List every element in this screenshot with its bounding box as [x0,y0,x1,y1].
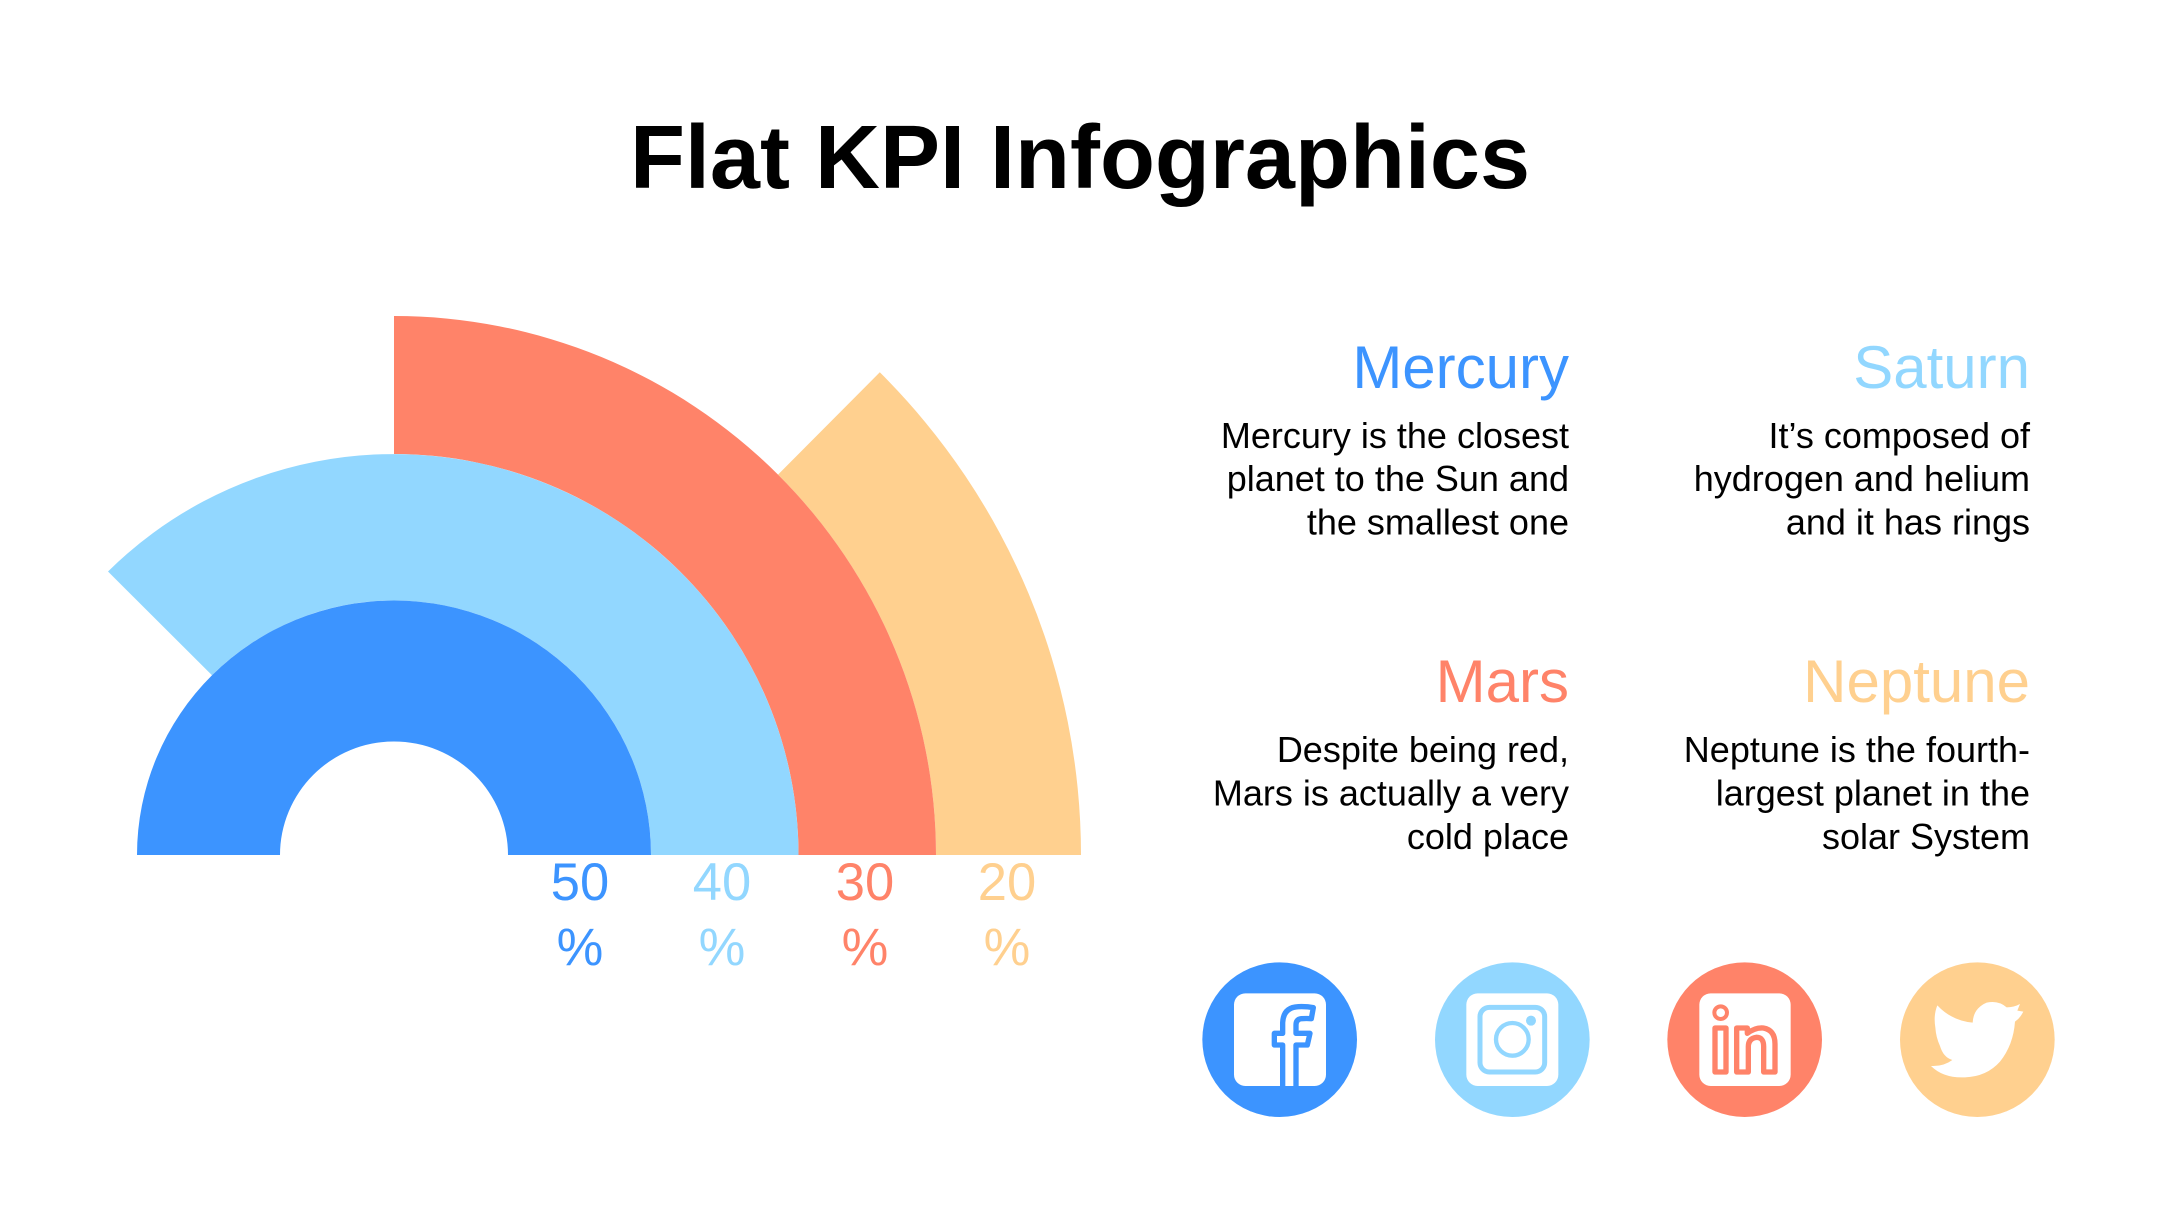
heading: Neptune: Neptune [1803,648,2030,715]
icon: facebook [1202,962,1357,1117]
text: Mercury description: the smallest one [1307,502,1569,542]
text: Neptune description: largest planet in the [1716,772,2030,814]
text: Saturn description: It’s composed of [1769,415,2031,456]
heading: Saturn: Saturn [1853,334,2030,401]
text: Saturn description: and it has rings [1786,502,2030,542]
label: 50%: % [557,918,603,977]
panel: Mercury [1221,334,1569,542]
panel: Saturn [1694,334,2031,542]
label: 50%: 50 [551,853,609,912]
label: 20%: % [984,918,1030,977]
arc: Mars 30% [394,316,936,855]
heading: Mars: Mars [1436,648,1569,715]
text: Mars description: Despite being red, [1277,729,1569,770]
panel: Mars [1213,648,1569,857]
icon: linkedin [1667,962,1822,1117]
arc: Saturn 40% [108,454,798,855]
chart value labels [551,853,1036,977]
heading: Mercury: Mercury [1352,334,1569,401]
text: Saturn description: hydrogen and helium [1694,458,2030,499]
label: 30%: % [842,918,888,977]
title: Flat KPI Infographics [630,108,1530,208]
chart: concentric radial KPI arcs [108,316,1081,855]
arc: Neptune 20% [778,372,1081,855]
label: 40%: 40 [693,853,751,912]
icon: twitter [1900,962,2055,1117]
panel: Neptune [1684,648,2030,857]
label: 40%: % [699,918,745,977]
text: Neptune description: solar System [1822,816,2030,857]
label: 20%: 20 [978,853,1036,912]
arc: Mercury 50% [137,600,651,855]
text: Neptune description: Neptune is the fourth- [1684,729,2030,770]
text: Mercury description: planet to the Sun and [1227,458,1569,499]
text: Mars description: cold place [1407,816,1569,857]
icon: instagram [1435,962,1590,1117]
label: 30%: 30 [836,853,894,912]
text: Mercury description: Mercury is the closest [1221,415,1569,456]
text: Mars description: Mars is actually a very [1213,772,1569,814]
